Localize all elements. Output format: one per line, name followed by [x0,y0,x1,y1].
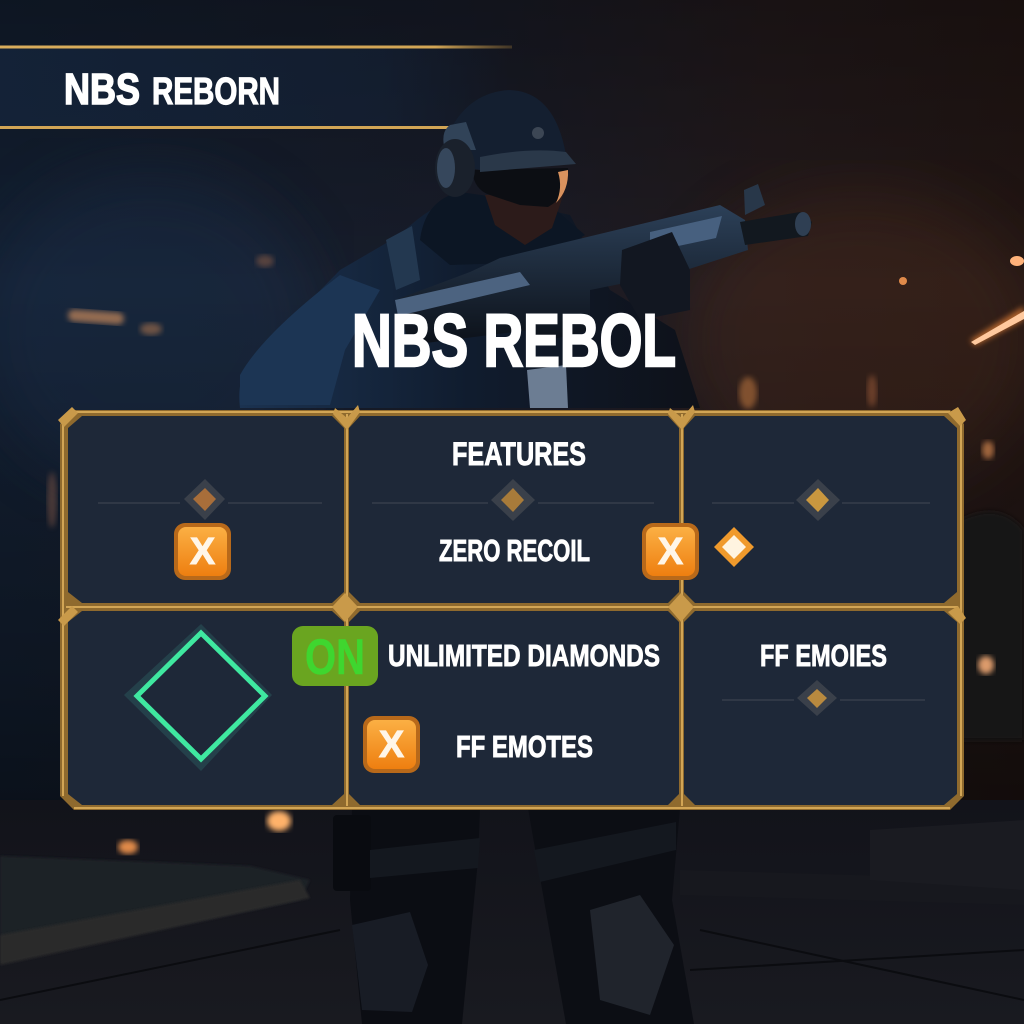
unlimited diamonds label: UNLIMITED DIAMONDS [388,638,660,673]
legs [333,808,694,1024]
header title [64,65,280,114]
vest strap [386,226,420,290]
header title: REBORN [152,71,280,113]
headset [435,122,476,197]
main title: NBS REBOL [352,299,676,382]
cell: top right [684,416,957,603]
ff emotes label: FF EMOTES [456,729,593,764]
header top gold line [0,46,512,48]
magazine [527,365,568,408]
x button bottom middle: X [379,724,405,766]
header band [0,46,512,129]
x button bottom middle [363,716,420,773]
torso and arms [239,195,700,408]
x button top left [174,523,231,580]
cell: bottom middle [349,611,679,805]
zero recoil label: ZERO RECOIL [439,533,590,568]
x button top left: X [190,531,216,573]
small diamond ornament 1 [184,479,225,520]
small diamond ornament 2 [491,479,535,521]
features heading: FEATURES [452,436,586,472]
goggle glare [556,170,568,203]
face [485,190,565,245]
cap [450,90,572,170]
goggles [472,168,568,207]
cell: top left [68,416,344,603]
cap badge [532,127,544,139]
orange white diamond icon [714,527,754,567]
small diamond ornament 4 [797,680,837,716]
x button top middle [642,523,699,580]
sleeve highlight [240,275,380,405]
cell: bottom left [68,611,344,805]
panel frame outer gold [60,410,964,810]
divider lines [98,503,930,700]
header bottom gold line [0,126,450,129]
x button top middle: X [658,531,684,573]
small diamond ornament 3 [796,479,840,521]
on toggle button: ON [305,629,365,685]
gloved hand [620,232,690,320]
feature panel grid [58,405,966,810]
cell: top middle [349,416,679,603]
ff emoies label: FF EMOIES [760,638,887,673]
green diamond icon [124,624,272,771]
cap brim [480,150,576,172]
gold highlights [63,412,961,808]
glowing sparks and bokeh lights [47,255,1024,854]
hood [420,192,585,265]
header title: NBS [64,65,140,114]
cell: bottom right [684,611,957,805]
soldier figure [239,90,812,1024]
rifle [395,184,812,345]
header background [0,47,510,127]
corner ornaments [58,405,966,626]
